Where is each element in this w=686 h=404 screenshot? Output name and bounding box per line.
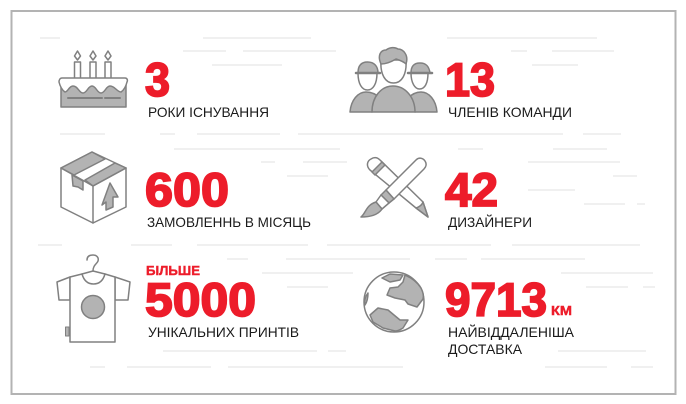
number: 42: 42 bbox=[445, 163, 498, 216]
label: designers: ДИЗАЙНЕРИ bbox=[448, 213, 532, 230]
icon: pencil and brush crossed bbox=[361, 158, 428, 217]
icon: globe bbox=[364, 272, 424, 332]
number: 13: 13 bbox=[445, 53, 495, 106]
stat: unique prints bbox=[57, 255, 299, 342]
icon: team of three people bbox=[350, 48, 437, 112]
label: orders per month: ЗАМОВЛЕННЬ В МІСЯЦЬ bbox=[147, 214, 311, 230]
stat: farthest delivery bbox=[364, 272, 575, 357]
icon: t-shirt on hanger bbox=[57, 255, 130, 342]
stat: monthly orders bbox=[61, 152, 311, 230]
label: unique prints: УНІКАЛЬНИХ ПРИНТІВ bbox=[148, 324, 299, 340]
stat: team members bbox=[350, 48, 572, 120]
label: years: РОКИ ІСНУВАННЯ bbox=[148, 104, 269, 120]
stat: designers bbox=[361, 158, 532, 230]
icon: birthday cake bbox=[59, 51, 127, 107]
label: farthest delivery bbox=[448, 323, 575, 357]
number: 600: 600 bbox=[145, 163, 229, 216]
unit: km: КМ bbox=[551, 303, 572, 318]
icon: parcel box bbox=[61, 152, 126, 223]
number: 9713: 9713 bbox=[445, 273, 547, 326]
number: 3: 3 bbox=[145, 53, 170, 106]
number: 5000: 5000 bbox=[145, 273, 256, 326]
stat: years of existence bbox=[59, 51, 269, 120]
label: farthest delivery: ДОСТАВКА bbox=[448, 341, 523, 357]
small heading: more than: БІЛЬШЕ bbox=[146, 263, 200, 278]
label: team members: ЧЛЕНІВ КОМАНДИ bbox=[448, 104, 572, 120]
label: farthest delivery: НАЙВІДДАЛЕНІША bbox=[448, 323, 575, 340]
